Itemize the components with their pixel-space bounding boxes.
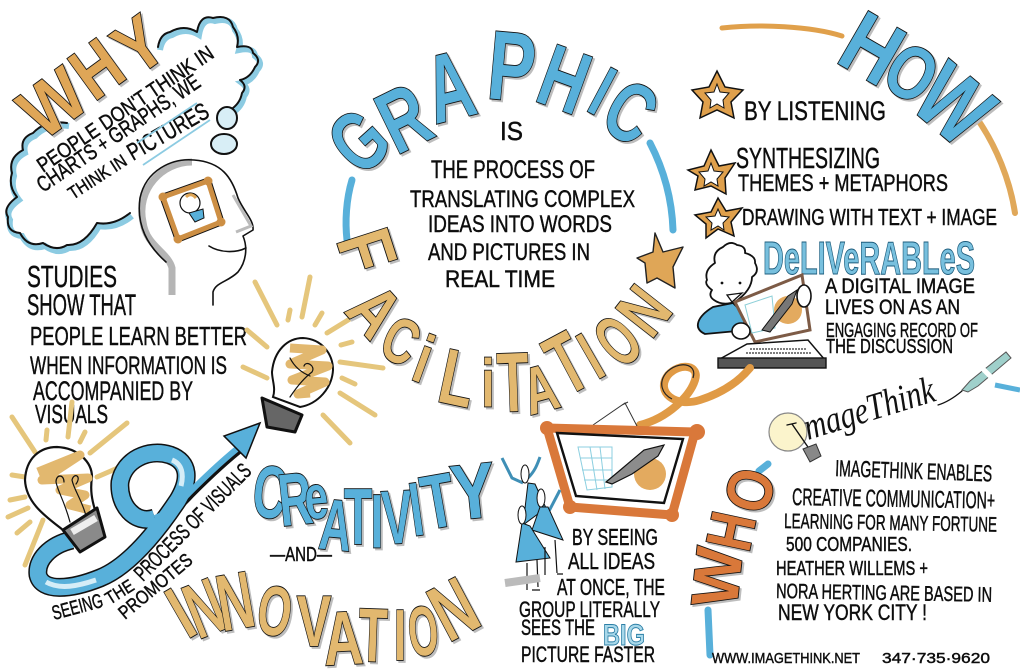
heading: FACILITATION: L	[432, 332, 483, 425]
heading: FACILITATION: C	[370, 302, 431, 380]
text: studies: ACCOMPANIED BY	[33, 376, 193, 406]
heading: INNOVATION: V	[297, 582, 331, 662]
heading: CREATIVITY: I	[404, 467, 428, 553]
heading: GRAPHIC: R	[362, 65, 446, 173]
thought bubble: upper	[217, 107, 237, 129]
blue arrow ribbon	[38, 423, 260, 587]
thought bubble: lower	[211, 134, 237, 154]
socket	[63, 508, 105, 552]
cloud text: CHARTS + GRAPHS, WE	[32, 69, 205, 197]
center definition text: TRANSLATING COMPLEX	[410, 186, 635, 213]
heading: WHY	[3, 0, 180, 154]
person middle	[532, 507, 563, 540]
light rays right	[243, 277, 383, 443]
heading: WHO: W	[677, 544, 757, 610]
footer contact: WWW.IMAGETHINK.NET	[712, 650, 860, 667]
seeing ideas text: AT ONCE, THE	[557, 574, 665, 600]
how list: BY LISTENING	[744, 96, 886, 126]
heading: FACILITATION	[321, 218, 687, 430]
text along arrow	[50, 458, 256, 625]
heading: FACILITATION: O	[578, 299, 657, 382]
how list: THEMES + METAPHORS	[738, 170, 948, 197]
cloud text: PICTURES	[122, 98, 214, 166]
heading: WHO	[677, 460, 790, 610]
imagethink logo bulb	[769, 413, 821, 462]
who text: HEATHER WILLEMS +	[776, 558, 928, 580]
heading: GRAPHIC: A	[414, 29, 485, 145]
light bulb left	[25, 447, 105, 552]
text: studies: VISUALS	[35, 399, 108, 429]
heading: WHY: Y	[97, 0, 180, 91]
text: and: —AND—	[270, 544, 332, 566]
seeing ideas text: ALL IDEAS	[568, 548, 655, 574]
heading: FACILITATION: T	[531, 314, 604, 414]
cloud text: PEOPLE DON'T THINK IN	[33, 42, 218, 177]
socket	[262, 398, 302, 432]
hair and face	[706, 243, 757, 304]
deliverables text: LIVES ON AS AN	[825, 296, 960, 319]
grid sketch	[578, 447, 612, 490]
heading: CREATIVITY: T	[344, 472, 372, 561]
center definition text: IS	[500, 116, 523, 146]
heading: INNOVATION: I	[153, 573, 208, 653]
center definition text: AND PICTURES IN	[428, 239, 590, 266]
star: gold	[637, 233, 683, 288]
person back	[523, 483, 546, 525]
heading: HOW: O	[869, 25, 953, 122]
text: studies: PEOPLE LEARN BETTER	[30, 321, 247, 351]
star: synthesizing	[688, 150, 735, 194]
center definition text	[410, 116, 635, 293]
text along arrow: PROMOTES	[115, 550, 197, 624]
heading: GRAPHIC: G	[310, 90, 408, 192]
heading: GRAPHIC: P	[484, 11, 540, 124]
heading: WHO: O	[710, 460, 790, 520]
heading: FACILITATION: I	[566, 319, 616, 393]
heading: CREATIVITY: V	[380, 475, 415, 561]
text: studies: WHEN INFORMATION IS	[30, 352, 227, 380]
light rays left	[8, 402, 127, 565]
heading: CREATIVITY: T	[415, 457, 462, 546]
light bulb right	[262, 338, 333, 432]
laptop	[718, 340, 825, 360]
center definition text: REAL TIME	[445, 266, 555, 293]
heading: CREATIVITY: e	[301, 462, 331, 533]
heading: CREATIVITY: A	[316, 484, 355, 567]
heading: INNOVATION: O	[253, 571, 297, 653]
heading: FACILITATION: F	[321, 218, 414, 282]
deliverables text: A DIGITAL IMAGE	[825, 275, 975, 298]
text along arrow: SEEING	[50, 590, 106, 625]
center definition text: IDEAS INTO WORDS	[428, 211, 612, 238]
seeing ideas text: GROUP LITERALLY	[519, 597, 660, 622]
heading: INNOVATION	[153, 555, 493, 670]
hands	[797, 285, 811, 307]
small bulb	[180, 193, 200, 213]
head with idea	[139, 160, 253, 305]
picture frame large	[540, 402, 705, 522]
person with tablet	[698, 243, 826, 368]
who text	[776, 455, 997, 625]
heading: INNOVATION: N	[172, 561, 237, 655]
text: studies: SHOW THAT	[27, 289, 136, 322]
seeing ideas text: PICTURE FASTER	[521, 642, 655, 667]
heading: CREATIVITY	[249, 446, 500, 567]
heading: HOW: W	[895, 43, 1013, 166]
orange ribbon	[640, 365, 750, 425]
heading: WHO: H	[694, 506, 770, 557]
thought cloud	[6, 17, 260, 251]
text: studies	[27, 259, 247, 429]
footer contact: 347·735·9620	[882, 650, 990, 667]
heading: WHY: H	[55, 24, 139, 116]
imagethink logo: mageThink	[798, 369, 941, 449]
text along arrow: THE	[102, 576, 138, 608]
text: studies: STUDIES	[27, 259, 117, 294]
group of people	[502, 457, 563, 590]
heading: GRAPHIC: H	[526, 27, 602, 134]
word: big: BIG	[603, 619, 645, 652]
pen	[606, 445, 664, 484]
how list	[736, 96, 997, 230]
heading: FACILITATION: N	[602, 272, 687, 350]
heading: CREATIVITY: I	[371, 479, 383, 564]
heading: INNOVATION: N	[414, 559, 493, 658]
deliverables text: THE DISCUSSION	[826, 336, 953, 358]
who accent lines	[708, 385, 1020, 655]
orange circle	[634, 458, 666, 490]
footer contact	[712, 650, 990, 667]
text along arrow: PROCESS OF VISUALS	[129, 458, 256, 586]
seeing ideas text: SEES THE	[521, 615, 595, 640]
circle arcs	[346, 143, 673, 240]
who text: NEW YORK CITY !	[778, 600, 927, 625]
pen	[962, 352, 1011, 392]
deliverables text	[825, 275, 978, 358]
seeing ideas text	[519, 524, 665, 667]
smile	[209, 246, 246, 252]
heading: FACILITATION: A	[515, 350, 566, 430]
star: drawing	[695, 198, 742, 238]
how arcs	[722, 26, 1015, 213]
person front	[516, 523, 550, 562]
heading: FACILITATION: A	[332, 269, 418, 353]
seeing ideas text: BY SEEING	[572, 524, 658, 550]
heading: CREATIVITY: C	[249, 450, 291, 536]
picture frame	[163, 181, 221, 239]
heading: FACILITATION: T	[496, 335, 531, 430]
heading: FACILITATION: i	[481, 346, 495, 422]
star: listening	[692, 71, 743, 118]
heading: INNOVATION: N	[210, 555, 261, 649]
heading: INNOVATION: O	[404, 591, 442, 670]
center definition text: THE PROCESS OF	[431, 156, 595, 184]
heading: CREATIVITY: Y	[447, 446, 500, 537]
cloud text: THINK IN	[64, 151, 131, 203]
heading: WHY: W	[3, 51, 102, 154]
shirt	[698, 303, 748, 334]
heading: FACILITATION: i	[404, 320, 443, 397]
heading: HOW	[824, 0, 1013, 166]
heading: CREATIVITY: R	[274, 457, 316, 543]
heading: GRAPHIC: C	[588, 61, 673, 164]
who text: 500 COMPANIES.	[786, 534, 912, 556]
tablet	[735, 275, 810, 342]
legs	[527, 540, 563, 590]
heading: GRAPHIC	[310, 11, 673, 192]
heading: GRAPHIC: I	[577, 53, 627, 130]
how list: SYNTHESIZING	[736, 143, 880, 175]
